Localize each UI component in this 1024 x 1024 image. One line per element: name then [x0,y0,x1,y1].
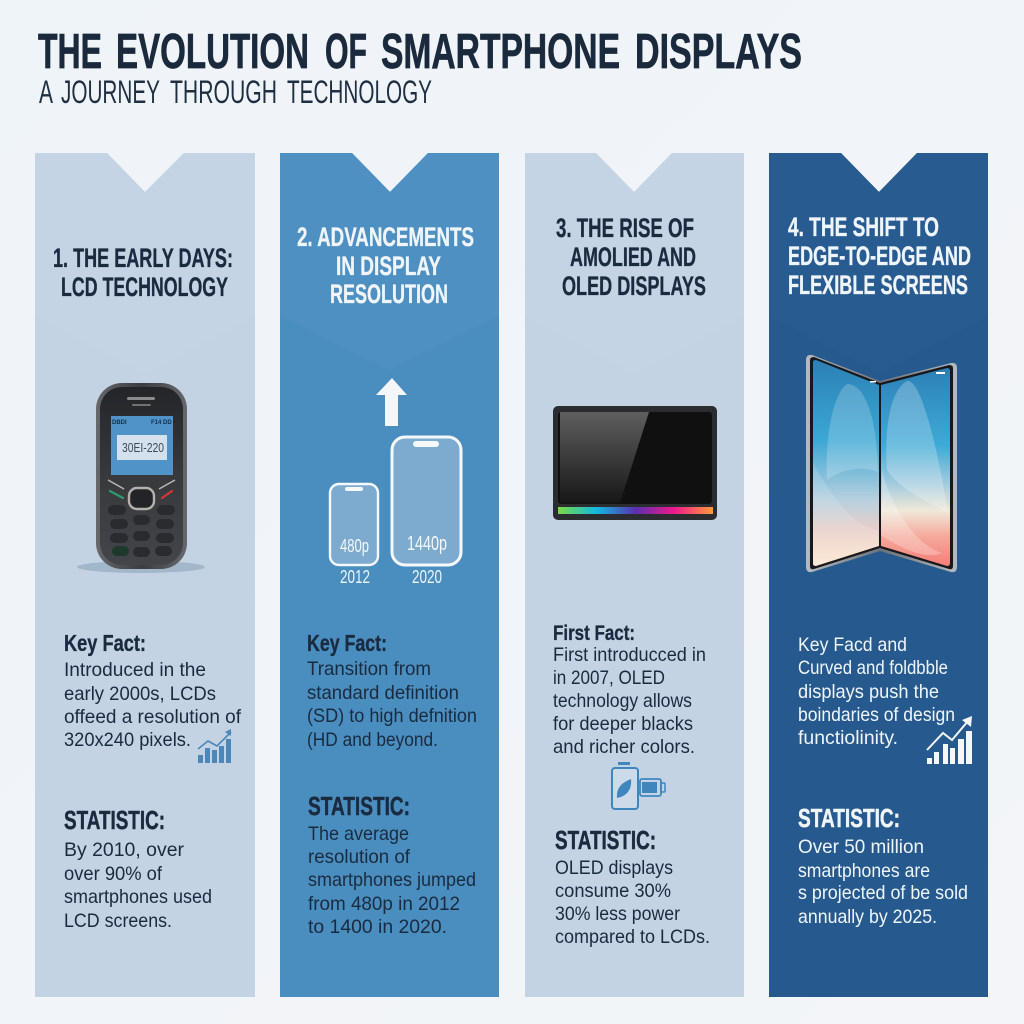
heading 2 [297,222,474,309]
icon: growth chart 4 [927,716,972,764]
title: OF [325,25,367,79]
statistic 4 [798,803,968,928]
statistic 2: smartphones jumped [308,869,476,891]
title: DISPLAYS [635,25,802,79]
heading 3: 3. THE RISE OF [556,213,694,243]
heading 2: IN DISPLAY [336,251,441,281]
key fact 4: displays push the [798,681,939,703]
key fact 2 [307,630,477,751]
key fact 3 [553,622,706,758]
title: THE [38,25,102,79]
statistic 1: By 2010, over [64,839,184,861]
statistic 4: annually by 2025. [798,906,937,928]
statistic 3 [555,825,710,948]
statistic 1: over 90% of [64,863,163,885]
heading 1 [53,243,233,302]
heading 2: 2. ADVANCEMENTS [297,222,474,252]
panel 4: flexible screens [769,153,988,997]
key fact 2: (HD and beyond. [307,729,438,751]
statistic 3: compared to LCDs. [555,926,710,948]
key fact 1 [64,630,242,751]
key fact 4: Key Facd and [798,634,907,656]
icon: large phone 1440p: 2020 [412,567,442,587]
icon: foldable phone [806,355,957,572]
key fact 1: Introduced in the [64,659,206,681]
icon: large phone 1440p [392,437,461,587]
key fact 3: First Fact: [553,622,635,645]
icon: small phone 480p [330,484,378,587]
key fact 1: offeed a resolution of [64,706,242,728]
statistic 4: s projected of be sold [798,882,968,904]
title: SMARTPHONE [381,25,620,79]
subtitle [39,74,432,110]
key fact 2: standard definition [307,682,459,704]
key fact 4: Curved and foldbble [798,657,948,679]
statistic 2: STATISTIC: [308,791,410,821]
statistic 1: STATISTIC: [64,805,165,835]
key fact 3: First introducced in [553,644,706,666]
icon: large phone 1440p: 1440p [407,533,447,555]
key fact 1: 320x240 pixels. [64,729,191,751]
key fact 3: technology allows [553,690,692,712]
heading 2: RESOLUTION [330,279,448,309]
subtitle: TECHNOLOGY [287,74,432,110]
subtitle: JOURNEY [61,74,160,110]
statistic 2: The average [308,823,409,845]
statistic 2: to 1400 in 2020. [308,916,447,938]
key fact 2: Key Fact: [307,630,387,656]
heading 3: OLED DISPLAYS [562,271,706,301]
key fact 3: in 2007, OLED [553,667,665,689]
key fact 1: early 2000s, LCDs [64,683,216,705]
key fact 3: and richer colors. [553,736,695,758]
statistic 1: LCD screens. [64,910,172,932]
heading 4: 4. THE SHIFT TO [788,212,939,242]
heading 1: 1. THE EARLY DAYS: [53,243,233,273]
statistic 4: smartphones are [798,860,930,882]
icon: feature phone: F14 DD [151,420,172,426]
title: EVOLUTION [116,25,309,79]
icon: feature phone [77,383,205,573]
panel 3: AMOLED and OLED [525,153,744,997]
statistic 3: STATISTIC: [555,825,656,855]
icon: feature phone: 30EI-220 [122,440,164,455]
icon: battery with leaf [612,762,665,809]
key fact 4: functiolinity. [798,727,898,749]
statistic 3: consume 30% [555,880,671,902]
key fact 1: Key Fact: [64,630,146,656]
statistic 1: smartphones used [64,886,212,908]
statistic 3: 30% less power [555,903,680,925]
statistic 4: STATISTIC: [798,803,900,833]
icon: feature phone: DBDI [112,420,127,426]
heading 3: AMOLIED AND [570,242,696,272]
statistic 2 [308,791,476,938]
panel 2: display resolution [280,153,499,997]
panel 1: LCD technology [35,153,255,997]
heading 4 [788,212,971,300]
icon: OLED screen [553,406,717,520]
statistic 3: OLED displays [555,857,673,879]
key fact 3: for deeper blacks [553,713,693,735]
icon: small phone 480p: 480p [340,536,369,556]
heading 3 [556,213,706,301]
key fact 2: Transition from [307,658,431,680]
subtitle: A [39,74,53,110]
icon: up arrow [376,378,407,426]
title [38,25,802,79]
heading 1: LCD TECHNOLOGY [61,272,228,302]
subtitle: THROUGH [170,74,277,110]
statistic 4: Over 50 million [798,836,924,858]
key fact 4 [798,634,955,749]
icon: growth chart 1 [198,729,231,763]
statistic 1 [64,805,212,932]
key fact 4: boindaries of design [798,704,955,726]
key fact 2: (SD) to high defnition [307,705,477,727]
statistic 2: resolution of [308,846,411,868]
statistic 2: from 480p in 2012 [308,893,460,915]
icon: small phone 480p: 2012 [340,567,370,587]
